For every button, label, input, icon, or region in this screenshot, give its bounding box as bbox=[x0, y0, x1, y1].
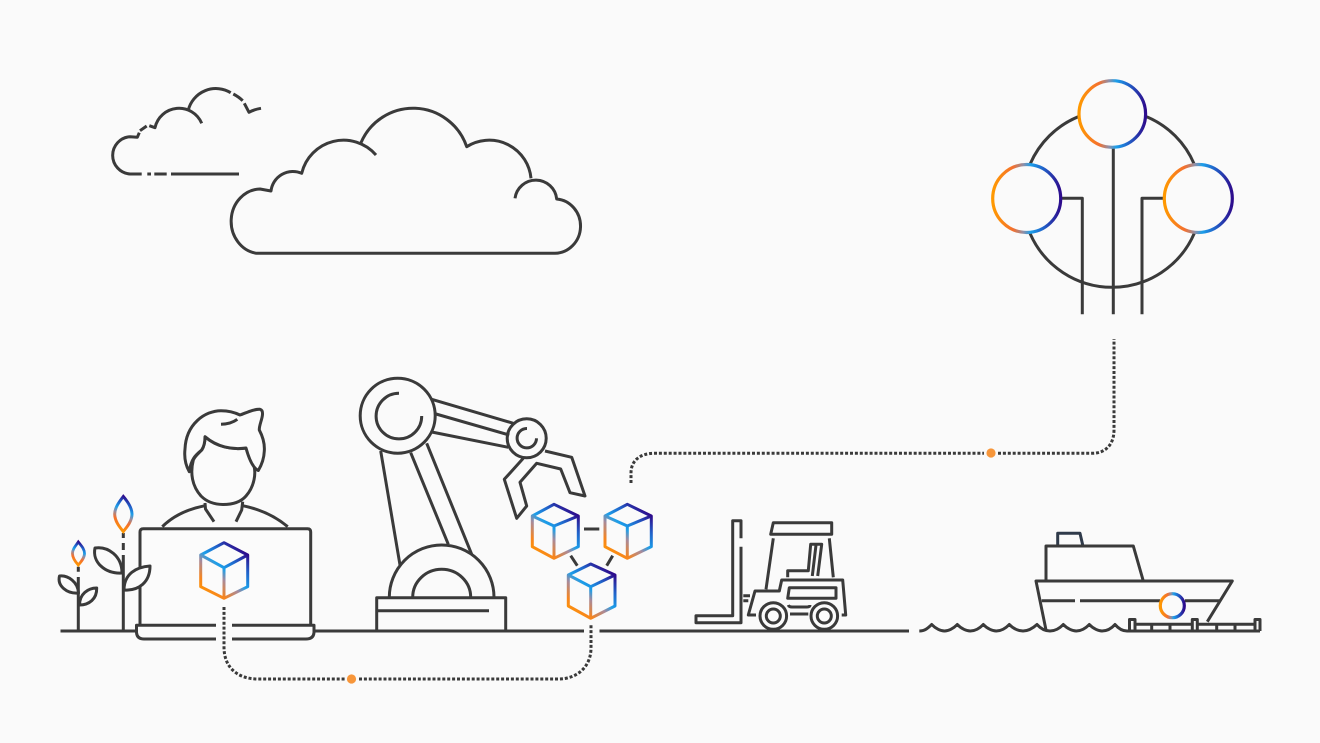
dotted path left bbox=[631, 453, 984, 483]
cabin bbox=[1046, 546, 1143, 581]
front wheel bbox=[811, 603, 838, 629]
water waves bbox=[919, 624, 1127, 631]
forklift bbox=[696, 521, 846, 629]
orange dot bbox=[986, 448, 996, 458]
ship bbox=[1036, 533, 1232, 630]
large bud bbox=[115, 496, 132, 532]
leaves bbox=[59, 548, 122, 605]
node: top bbox=[1079, 81, 1146, 147]
cube cluster bbox=[532, 504, 651, 618]
hull bbox=[1036, 581, 1232, 630]
shoulder joint bbox=[360, 378, 435, 453]
gripper bbox=[504, 451, 585, 518]
neck bbox=[205, 502, 243, 522]
hull stripe bbox=[1042, 599, 1220, 602]
network tree with three nodes bbox=[993, 81, 1232, 314]
dotted path right bbox=[359, 625, 591, 679]
shoulders bbox=[162, 506, 288, 527]
cube 3 bbox=[568, 564, 615, 618]
mast and forks bbox=[696, 521, 741, 623]
face bbox=[192, 437, 255, 504]
laptop screen bbox=[140, 529, 311, 625]
node: left bbox=[993, 164, 1061, 232]
dome base bbox=[389, 545, 494, 597]
wrist joint bbox=[507, 419, 546, 458]
plant stems bbox=[78, 533, 123, 631]
arm struts bbox=[432, 399, 513, 447]
cube links bbox=[571, 529, 613, 566]
porthole bbox=[1160, 594, 1184, 618]
body bbox=[748, 580, 846, 615]
body panel bbox=[788, 588, 836, 598]
robot arm bbox=[360, 378, 585, 631]
cube on laptop bbox=[201, 543, 248, 598]
dotted connector: laptop to robot cubes bbox=[224, 607, 591, 684]
pedestal bbox=[377, 598, 506, 631]
dock bbox=[1127, 620, 1260, 631]
roof bbox=[771, 523, 832, 534]
large right leaf overlapping laptop bbox=[124, 566, 150, 590]
hair bbox=[185, 409, 264, 472]
tree outline bbox=[1030, 117, 1194, 314]
large cloud bbox=[231, 108, 581, 253]
dotted connector: cubes to network tree bbox=[631, 339, 1114, 483]
seat bbox=[788, 544, 822, 577]
orange dot bbox=[347, 674, 356, 684]
dotted path left bbox=[224, 607, 345, 679]
small bud bbox=[72, 542, 84, 565]
hair detail bbox=[221, 419, 237, 424]
plants bbox=[59, 496, 132, 631]
cube 2 bbox=[605, 504, 651, 558]
dotted path right bbox=[998, 339, 1114, 453]
details bbox=[743, 596, 810, 614]
funnel bbox=[1058, 533, 1083, 545]
small dashed cloud bbox=[113, 89, 261, 174]
rear wheel bbox=[760, 603, 787, 629]
person bbox=[162, 409, 288, 527]
node: right bbox=[1164, 164, 1232, 232]
laptop bbox=[124, 529, 314, 639]
posts bbox=[766, 538, 833, 589]
ground line bbox=[60, 630, 909, 632]
cube 1 bbox=[532, 504, 578, 558]
laptop base bbox=[136, 625, 314, 639]
